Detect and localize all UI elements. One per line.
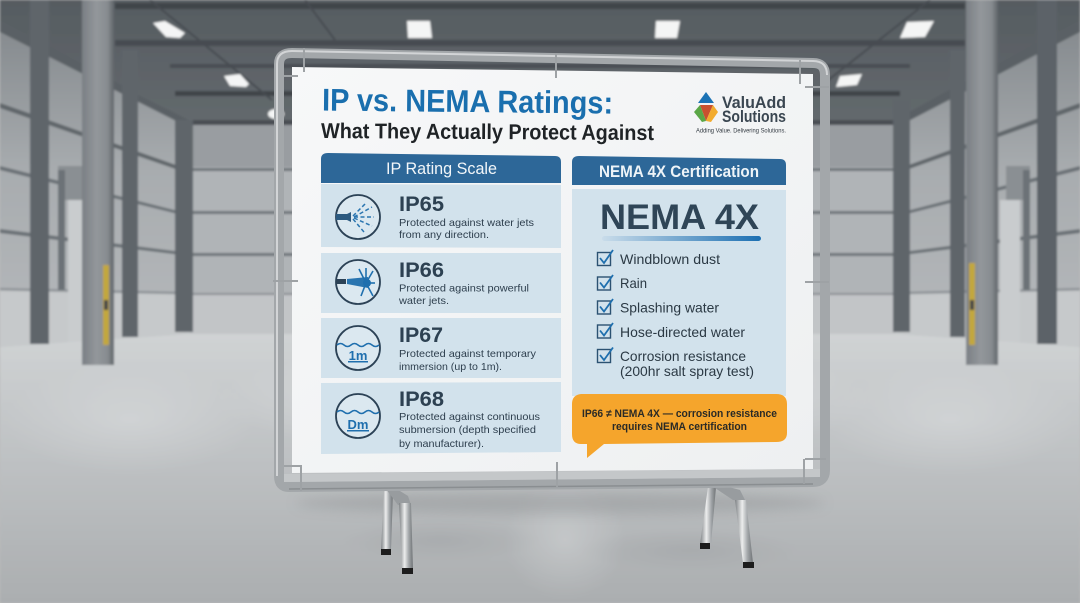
sign board (292, 67, 813, 473)
title line 1: IP vs. NEMA Ratings: (322, 82, 613, 121)
IP65 description: from any direction. (399, 229, 489, 241)
IP66 description (398, 282, 529, 307)
stand legs (381, 484, 754, 574)
IP67 label: IP67 (399, 324, 443, 347)
panel body (572, 189, 786, 396)
panel: IP rating scale (321, 153, 561, 454)
IP68 description (399, 411, 540, 450)
IP68 description: Protected against continuous (399, 411, 540, 423)
callout: requires NEMA certification (612, 421, 747, 433)
item: corrosion resistance (598, 348, 754, 379)
underline (602, 236, 761, 241)
heading: IP Rating Scale: IP Rating Scale (386, 159, 497, 178)
item: rain (598, 275, 647, 291)
logo name: ValuAdd (722, 93, 786, 112)
item: corrosion resistance: (200hr salt spray test) (620, 363, 754, 379)
checklist (598, 250, 754, 379)
left wall (0, 20, 190, 350)
logo mark (694, 92, 718, 122)
item: splashing water: Splashing water (620, 300, 719, 316)
NEMA 4X big label: NEMA 4X (600, 198, 760, 237)
frame bottom bar (284, 469, 820, 482)
row: IP67 (321, 318, 561, 378)
icon: powerful jet (336, 260, 380, 304)
item: windblown dust: Windblown dust (620, 251, 720, 267)
row: IP65 (321, 184, 561, 248)
heading: NEMA 4X Certification: NEMA 4X Certification (599, 162, 759, 181)
left legs (381, 486, 413, 574)
item: hose-directed water: Hose-directed water (620, 324, 745, 340)
title (321, 82, 654, 145)
logo tagline: Adding Value. Delivering Solutions. (696, 128, 786, 134)
IP66 label: IP66 (399, 259, 444, 282)
IP65 description: Protected against water jets (399, 217, 534, 229)
floor shadow under sign (295, 492, 825, 514)
ceiling lights (153, 21, 934, 119)
sign frame (277, 51, 827, 489)
icon: 1m immersion (336, 326, 380, 370)
right legs (700, 484, 754, 568)
back wall (190, 125, 895, 335)
item: rain: Rain (620, 275, 647, 291)
callout: IP66 ≠ NEMA 4X — corrosion resistance (582, 408, 777, 420)
frame clips (273, 48, 829, 491)
logo: ValuAdd Solutions (694, 92, 786, 134)
IP66 description: water jets. (398, 295, 449, 307)
heading: IP Rating Scale (321, 153, 561, 183)
IP65 description (399, 217, 534, 241)
structural columns (30, 0, 1057, 365)
panel: NEMA 4X certification (572, 156, 786, 396)
icon: 1m immersion: 1m (349, 348, 367, 363)
IP66 description: Protected against powerful (399, 282, 529, 294)
logo: ValuAdd Solutions: Solutions (722, 107, 786, 126)
row: IP66 (321, 253, 561, 313)
icon: Dm submersion: Dm (348, 417, 368, 432)
right wall (895, 20, 1080, 350)
ceiling (0, 0, 1080, 130)
IP65 label: IP65 (399, 193, 444, 216)
IP68 label: IP68 (399, 388, 444, 411)
IP67 description (399, 348, 537, 373)
title line 2: What They Actually Protect Against (321, 119, 654, 145)
heading: NEMA 4X Certification (572, 156, 786, 185)
item: corrosion resistance: Corrosion resistance (620, 348, 746, 364)
IP68 description: submersion (depth specified (399, 424, 536, 436)
row: IP68 (321, 382, 561, 454)
IP67 description: immersion (up to 1m). (399, 361, 502, 373)
callout (572, 394, 787, 458)
icon: water spray (336, 195, 380, 239)
IP68 description: by manufacturer). (399, 438, 484, 450)
floor (0, 334, 1080, 603)
icon: Dm submersion (336, 394, 380, 438)
IP67 description: Protected against temporary (399, 348, 537, 360)
